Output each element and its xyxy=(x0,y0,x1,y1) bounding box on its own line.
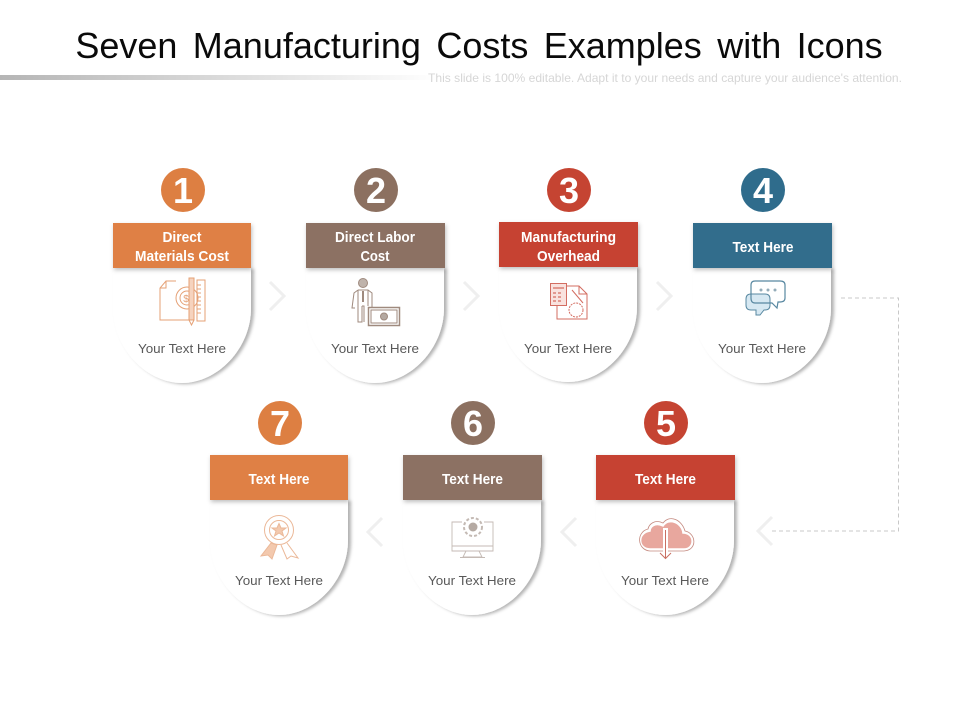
card body xyxy=(403,500,541,615)
header 6: Text Here xyxy=(442,471,503,488)
dashed connector 4 to 5 xyxy=(772,298,898,531)
card body xyxy=(306,268,444,383)
icon: document, coin, pencil and ruler xyxy=(160,278,205,325)
header 7: Text Here xyxy=(248,471,310,488)
arrow 7 from 6 xyxy=(368,518,382,546)
header 2 xyxy=(306,223,445,268)
step 2 card xyxy=(306,168,445,383)
icon: worker with banknote xyxy=(352,278,400,326)
body text 5: Your Text Here xyxy=(621,573,709,588)
body text 3: Your Text Here xyxy=(524,341,612,356)
header 1: Direct xyxy=(162,229,202,246)
header 7 xyxy=(210,455,348,500)
number badge 3 xyxy=(547,168,591,212)
header 5: Text Here xyxy=(635,471,696,488)
icon: calculator and invoice xyxy=(550,284,587,319)
icon: award ribbon xyxy=(261,516,298,559)
card body xyxy=(596,500,734,615)
header 2: Cost xyxy=(360,248,390,265)
number badge 5: 5 xyxy=(656,403,676,444)
header 5 xyxy=(596,455,735,500)
body text 6: Your Text Here xyxy=(428,573,516,588)
number badge 4: 4 xyxy=(753,170,773,211)
number badge 3: 3 xyxy=(559,170,579,211)
number badge 5 xyxy=(644,401,688,445)
header 2: Direct Labor xyxy=(335,229,415,246)
icon: computer with gear xyxy=(452,518,493,558)
body text 2: Your Text Here xyxy=(331,341,419,356)
header 3 xyxy=(499,222,638,267)
number badge 6: 6 xyxy=(463,403,483,444)
card body xyxy=(113,268,251,383)
card body xyxy=(210,500,348,615)
step 5 card xyxy=(596,401,735,615)
card body xyxy=(693,268,831,383)
number badge 1 xyxy=(161,168,205,212)
header 4: Text Here xyxy=(732,239,794,256)
number badge 7 xyxy=(258,401,302,445)
step 1 card xyxy=(113,168,251,383)
arrow 5 to connector xyxy=(758,517,772,545)
icon: cloud download xyxy=(640,519,694,558)
number badge 1: 1 xyxy=(173,170,193,211)
number badge 6 xyxy=(451,401,495,445)
number badge 4 xyxy=(741,168,785,212)
body text 4: Your Text Here xyxy=(718,341,806,356)
icon: document, coin, pencil and ruler: $ xyxy=(183,294,189,305)
body text 1: Your Text Here xyxy=(138,341,226,356)
header 3: Overhead xyxy=(537,248,600,265)
step 4 card xyxy=(693,168,832,383)
arrow 6 from 5 xyxy=(562,518,576,546)
number badge 2 xyxy=(354,168,398,212)
title rule xyxy=(0,75,440,80)
step 7 card xyxy=(210,401,348,615)
header 3: Manufacturing xyxy=(521,229,616,246)
title: Seven Manufacturing Costs Examples with Icons xyxy=(75,25,883,66)
step 6 card xyxy=(403,401,542,615)
arrow 3 to 4 xyxy=(657,282,671,310)
body text 7: Your Text Here xyxy=(235,573,323,588)
arrow 2 to 3 xyxy=(464,282,478,310)
arrow 1 to 2 xyxy=(270,282,284,310)
header 1 xyxy=(113,223,251,268)
number badge 7: 7 xyxy=(270,403,290,444)
icon: speech bubbles xyxy=(746,281,785,315)
card body xyxy=(499,267,637,382)
header 6 xyxy=(403,455,542,500)
header 1: Materials Cost xyxy=(135,248,229,265)
step 3 card xyxy=(499,168,638,382)
subtitle: This slide is 100% editable. Adapt it to your needs and capture your audience's attention. xyxy=(428,71,902,85)
header 4 xyxy=(693,223,832,268)
number badge 2: 2 xyxy=(366,170,386,211)
